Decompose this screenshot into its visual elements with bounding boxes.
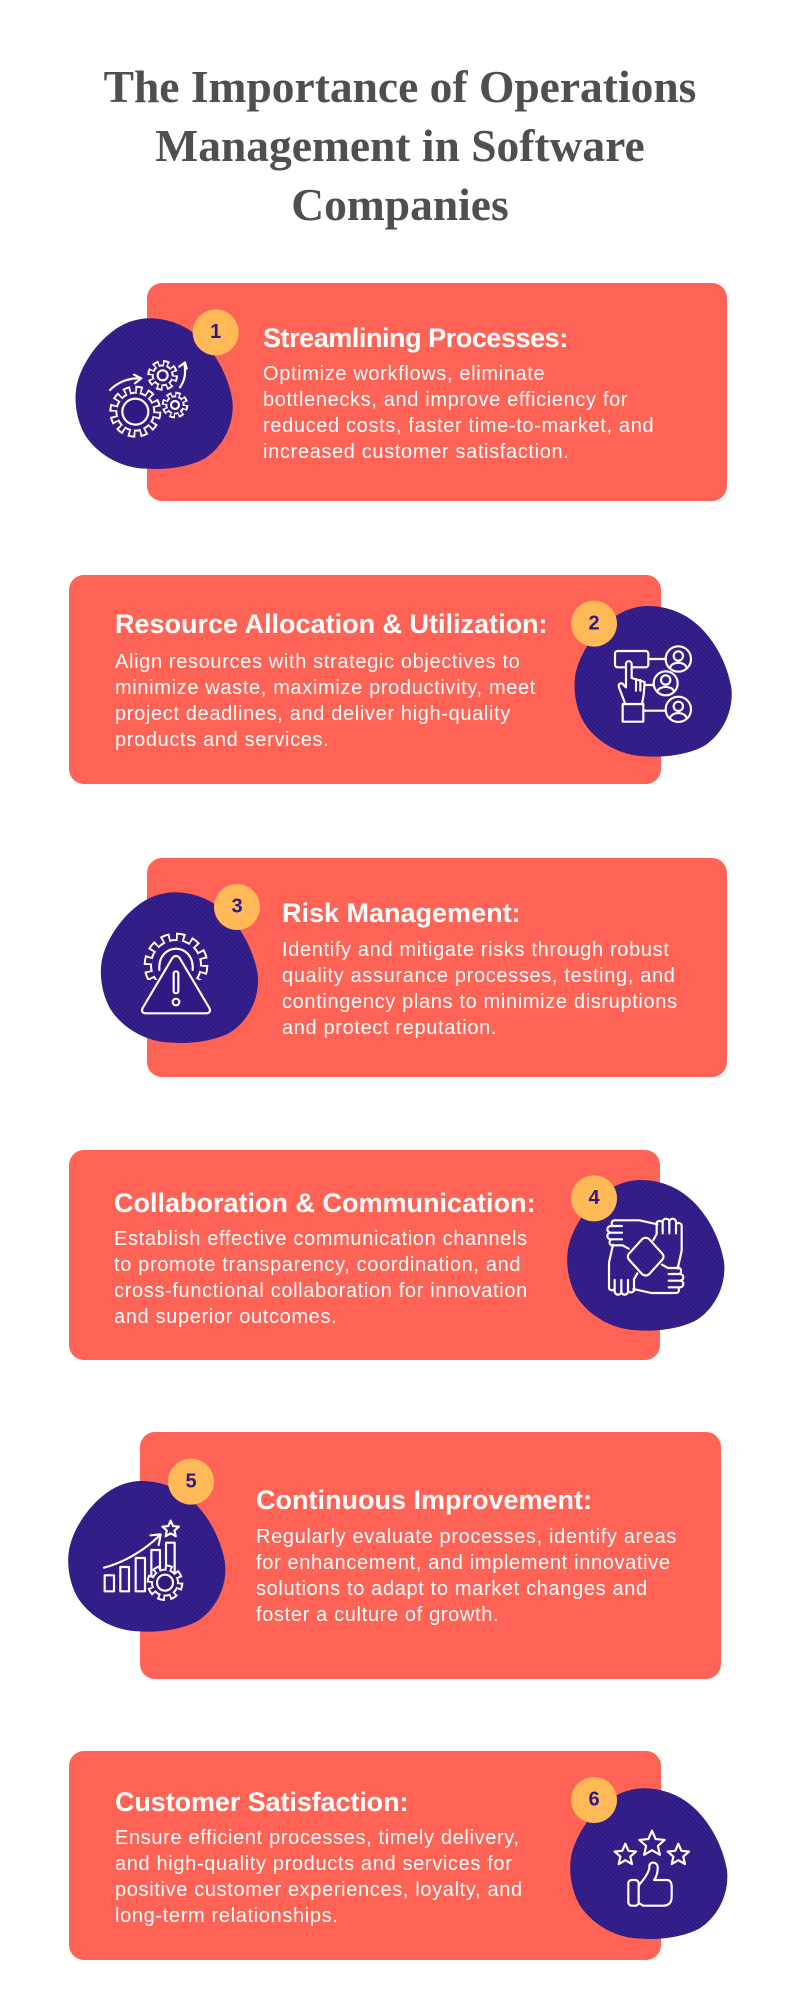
title xyxy=(104,61,696,230)
icon: gear and warning triangle on blob, badge 3: 3 xyxy=(231,896,243,918)
icon: gears with arrows on blob, badge 1: 1 xyxy=(210,321,221,343)
body text 1: bottlenecks, and improve efficiency for xyxy=(263,389,628,411)
icon: four interlocked hands on blob, badge 4 xyxy=(567,1175,724,1331)
body text 1: reduced costs, faster time-to-market, and xyxy=(263,415,654,437)
body text 1: Optimize workflows, eliminate xyxy=(263,363,545,385)
icon: thumbs up with stars on blob, badge 6 xyxy=(570,1777,728,1939)
body text 6: positive customer experiences, loyalty, and xyxy=(115,1879,523,1901)
title: Companies xyxy=(291,179,509,230)
body text 1 xyxy=(263,363,654,463)
icon: growth chart with gear and star on blob, badge 5: 5 xyxy=(185,1470,197,1492)
card background 3 xyxy=(147,858,727,1077)
body text 2: products and services. xyxy=(115,729,329,751)
panel: risk management xyxy=(100,858,727,1077)
icon: gear and warning triangle on blob, badge 3 xyxy=(100,884,260,1043)
body text 4: Establish effective communication channels xyxy=(114,1228,528,1250)
panel: continuous improvement xyxy=(68,1432,721,1679)
icon: thumbs up with stars on blob, badge 6: 6 xyxy=(588,1789,600,1811)
heading 5: Continuous Improvement: xyxy=(256,1485,592,1515)
body text 3: and protect reputation. xyxy=(282,1017,497,1039)
panel: customer satisfaction xyxy=(69,1751,728,1960)
heading 4: Collaboration & Communication: xyxy=(114,1188,536,1218)
body text 3: quality assurance processes, testing, and xyxy=(282,965,676,987)
body text 2: Align resources with strategic objectives to xyxy=(115,651,520,673)
panel: resource allocation xyxy=(69,575,732,784)
heading 2: Resource Allocation & Utilization: xyxy=(115,609,548,639)
body text 3: contingency plans to minimize disruptions xyxy=(282,991,678,1013)
body text 4: cross-functional collaboration for innovation xyxy=(114,1280,528,1302)
title: The Importance of Operations xyxy=(104,61,696,112)
body text 3 xyxy=(282,939,678,1039)
card background 6 xyxy=(69,1751,661,1960)
body text 4 xyxy=(114,1228,528,1328)
card background 1 xyxy=(147,283,727,501)
heading 6: Customer Satisfaction: xyxy=(115,1787,408,1817)
card background 4 xyxy=(69,1150,660,1360)
body text 4: to promote transparency, coordination, and xyxy=(114,1254,521,1276)
icon: hand selecting people on blob, badge 2: 2 xyxy=(588,612,600,634)
panel: collaboration and communication xyxy=(69,1150,724,1360)
body text 3: Identify and mitigate risks through robust xyxy=(282,939,670,961)
card background 2 xyxy=(69,575,661,784)
panel: streamlining processes xyxy=(76,283,727,501)
card background 5 xyxy=(140,1432,721,1679)
body text 5: Regularly evaluate processes, identify areas xyxy=(256,1526,677,1548)
heading 3: Risk Management: xyxy=(282,898,521,928)
body text 2: project deadlines, and deliver high-quality xyxy=(115,703,511,725)
body text 6: long-term relationships. xyxy=(115,1905,338,1927)
body text 6: Ensure efficient processes, timely delivery, xyxy=(115,1827,520,1849)
icon: four interlocked hands on blob, badge 4: 4 xyxy=(588,1187,600,1209)
body text 5 xyxy=(256,1526,677,1626)
body text 2: minimize waste, maximize productivity, meet xyxy=(115,677,536,699)
heading 1: Streamlining Processes: xyxy=(263,323,568,353)
body text 5: for enhancement, and implement innovative xyxy=(256,1552,671,1574)
body text 4: and superior outcomes. xyxy=(114,1306,337,1328)
icon: growth chart with gear and star on blob, badge 5 xyxy=(68,1458,226,1632)
icon: hand selecting people on blob, badge 2 xyxy=(571,600,732,757)
title: Management in Software xyxy=(155,120,645,171)
icon: gears with arrows on blob, badge 1 xyxy=(76,309,239,469)
body text 6: and high-quality products and services for xyxy=(115,1853,513,1875)
body text 2 xyxy=(115,651,536,751)
body text 1: increased customer satisfaction. xyxy=(263,441,569,463)
body text 5: solutions to adapt to market changes and xyxy=(256,1578,648,1600)
body text 5: foster a culture of growth. xyxy=(256,1604,499,1626)
body text 6 xyxy=(115,1827,523,1927)
